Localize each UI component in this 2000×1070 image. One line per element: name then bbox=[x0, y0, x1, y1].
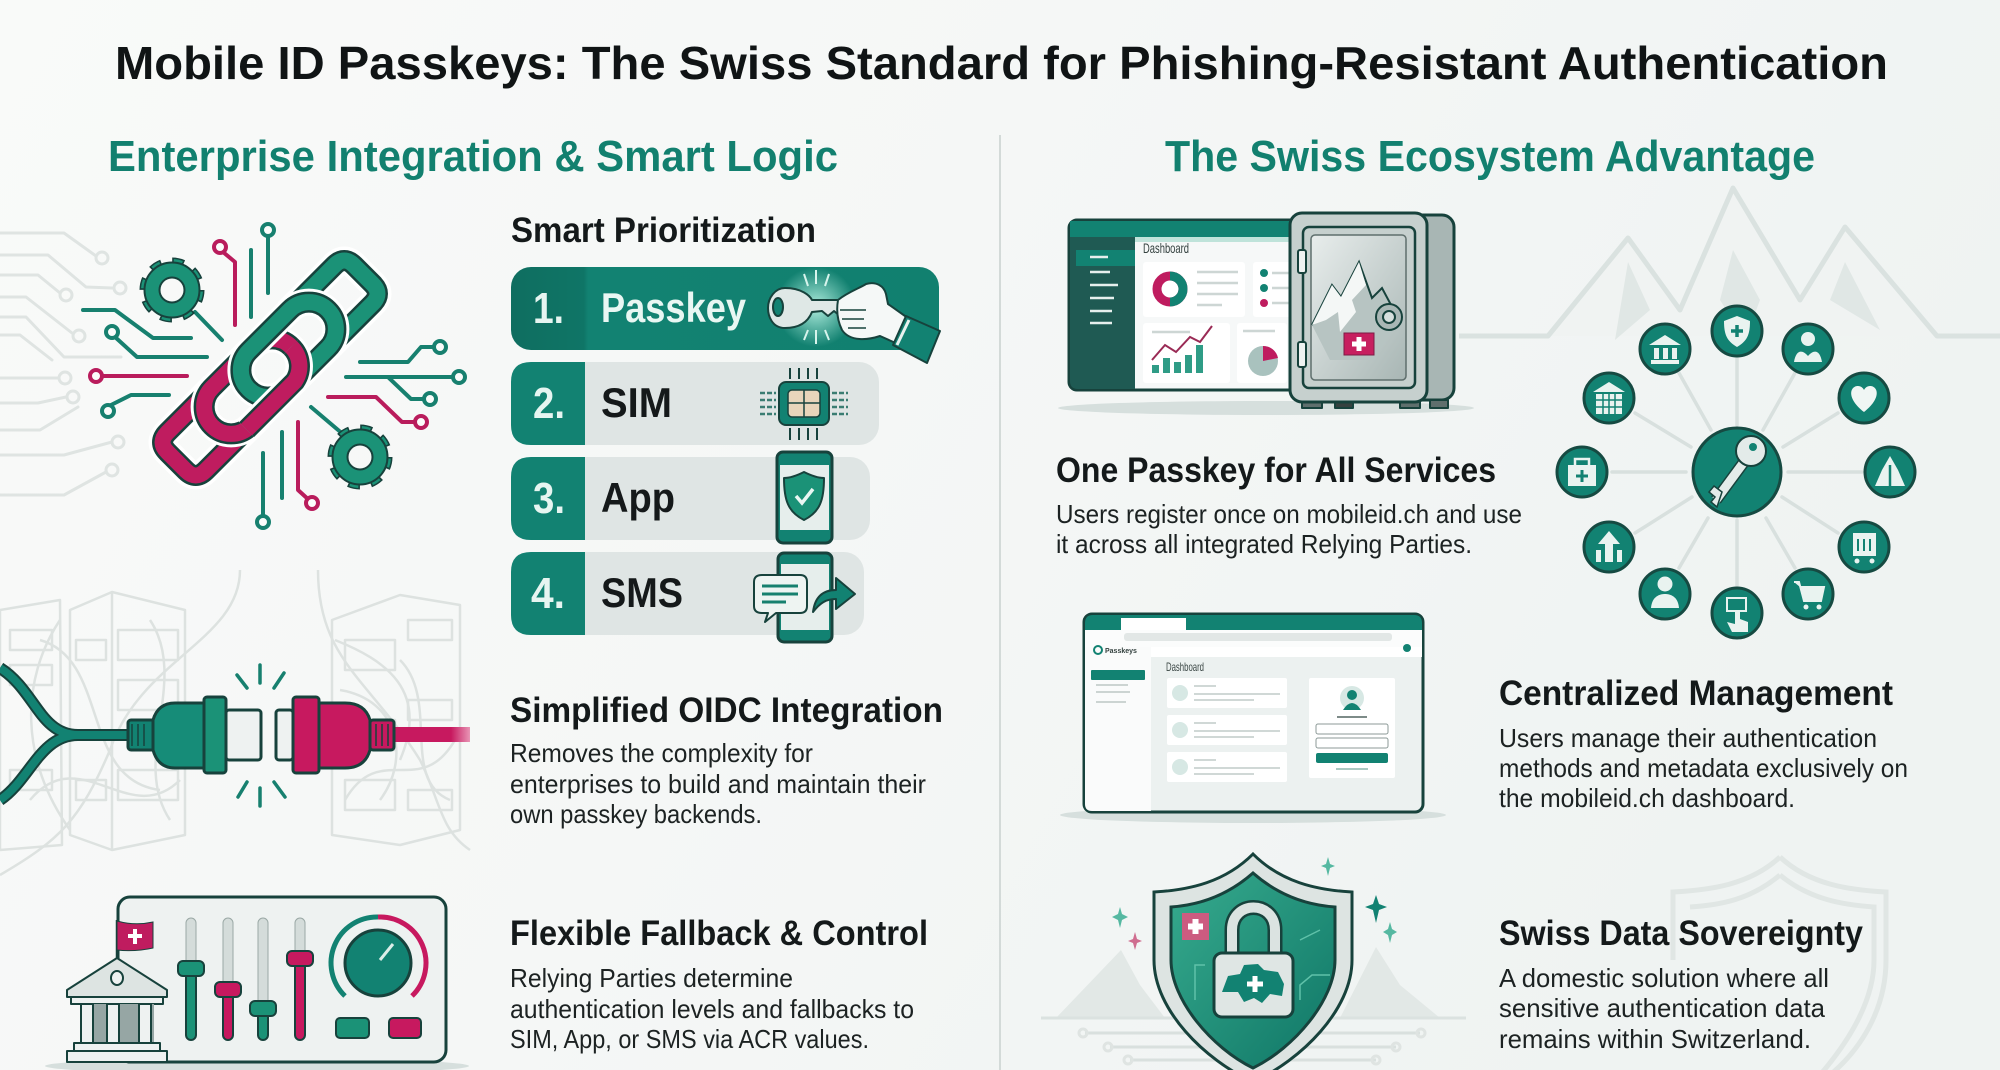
illustration: browser management dashboard: Dashboard bbox=[1166, 660, 1204, 674]
text block: Swiss data sovereignty: Swiss Data Sovereignty bbox=[1499, 914, 1863, 953]
text block: one passkey for all services bbox=[1056, 451, 1522, 559]
text block: one passkey for all services: Users register once on mobileid.ch and use bbox=[1056, 499, 1522, 529]
list item 2: SIM: SIM bbox=[601, 379, 672, 426]
node: community figures bbox=[1865, 447, 1915, 497]
button: pink bbox=[389, 1018, 421, 1038]
card: devices bbox=[1167, 715, 1287, 745]
list item 4: SMS: 4. bbox=[531, 569, 565, 618]
icon: connection sparks bbox=[237, 665, 285, 806]
node: bank bbox=[1640, 324, 1690, 374]
text block: Swiss data sovereignty: sensitive authentication data bbox=[1499, 993, 1826, 1023]
illustration: shield with lock and Swiss map bbox=[1041, 854, 1466, 1070]
text block: centralized management: the mobileid.ch dashboard. bbox=[1499, 783, 1795, 813]
list item 2: SIM: 2. bbox=[533, 379, 565, 428]
illustration: dashboard and vault bbox=[1058, 213, 1474, 415]
dashboard window bbox=[1069, 220, 1310, 390]
text block: simplified OIDC integration: Simplified OIDC Integration bbox=[510, 691, 943, 730]
icon: key in hand bbox=[768, 267, 940, 363]
title: Mobile ID Passkeys: The Swiss Standard for Phishing-Resistant Authentication bbox=[115, 37, 1888, 89]
illustration: browser management dashboard bbox=[1060, 614, 1446, 823]
text block: flexible fallback and control: authentication levels and fallbacks to bbox=[510, 994, 914, 1024]
diagram: passkey hub and service network bbox=[1557, 306, 1915, 638]
node: person with pin bbox=[1783, 324, 1833, 374]
heading: right column: The Swiss Ecosystem Advantage bbox=[1165, 132, 1815, 181]
illustration: control panel with institution bbox=[45, 897, 469, 1070]
icon: vault with Swiss flag bbox=[1290, 213, 1454, 408]
list item 4: SMS bbox=[511, 552, 864, 642]
text block: simplified OIDC integration bbox=[510, 691, 943, 829]
text block: Swiss data sovereignty: remains within Switzerland. bbox=[1499, 1024, 1811, 1054]
text block: simplified OIDC integration: own passkey backends. bbox=[510, 799, 762, 829]
icon: SIM chip bbox=[760, 368, 848, 440]
icon: padlock with Swiss map bbox=[1214, 908, 1293, 1017]
button: green bbox=[336, 1018, 369, 1038]
icon: phone with shield bbox=[777, 452, 832, 543]
background: ghost servers and cables bbox=[0, 570, 470, 875]
card: profile form bbox=[1309, 678, 1395, 778]
list item 3: App bbox=[511, 452, 870, 543]
background: ghost circuit lines bbox=[0, 233, 126, 495]
node: heart bbox=[1839, 373, 1889, 423]
text block: Swiss data sovereignty: A domestic solution where all bbox=[1499, 963, 1829, 993]
list item 1: passkey bbox=[511, 267, 940, 363]
heading: left column: Enterprise Integration & Smart Logic bbox=[108, 132, 838, 181]
icon: phone with message bubble and arrow bbox=[754, 553, 855, 642]
text block: simplified OIDC integration: Removes the complexity for bbox=[510, 738, 813, 768]
icon: sliders bbox=[178, 918, 313, 1040]
card: methods bbox=[1167, 678, 1287, 708]
text block: flexible fallback and control: Relying Parties determine bbox=[510, 963, 793, 993]
list item 1: passkey: Passkey bbox=[601, 284, 747, 331]
list item 2: SIM bbox=[511, 362, 879, 445]
node: medical bag bbox=[1557, 447, 1607, 497]
list item 4: SMS: SMS bbox=[601, 569, 683, 616]
icon: gear lower bbox=[333, 430, 387, 484]
list item 3: App: 3. bbox=[533, 474, 565, 523]
text block: flexible fallback and control bbox=[510, 914, 928, 1054]
icon: interlocked chain bbox=[158, 256, 382, 480]
text block: one passkey for all services: One Passkey for All Services bbox=[1056, 451, 1496, 490]
text block: Swiss data sovereignty bbox=[1499, 914, 1863, 1054]
text block: centralized management bbox=[1499, 674, 1908, 813]
hub: key bbox=[1693, 428, 1781, 516]
text block: one passkey for all services: it across all integrated Relying Parties. bbox=[1056, 529, 1472, 559]
background: ghost shield bbox=[1673, 857, 1886, 1070]
list item 3: App: App bbox=[601, 474, 675, 521]
text block: simplified OIDC integration: enterprises to build and maintain their bbox=[510, 769, 926, 799]
text block: centralized management: Centralized Management bbox=[1499, 674, 1893, 713]
node: hand tapping bbox=[1712, 588, 1762, 638]
icon: Swiss flag bbox=[1182, 913, 1209, 940]
heading: smart prioritization: Smart Prioritization bbox=[511, 211, 816, 250]
list item 1: passkey: 1. bbox=[533, 284, 564, 333]
ghost mountains and circuits behind shield bbox=[1041, 947, 1466, 1064]
illustration: plug and socket connector bbox=[0, 665, 470, 806]
card: metadata bbox=[1167, 752, 1287, 782]
dashboard window: Dashboard bbox=[1143, 240, 1189, 256]
text block: flexible fallback and control: SIM, App, or SMS via ACR values. bbox=[510, 1024, 869, 1054]
text block: flexible fallback and control: Flexible Fallback & Control bbox=[510, 914, 928, 953]
icon: sparkles bbox=[1112, 857, 1397, 950]
illustration: chain link with circuits bbox=[83, 224, 465, 528]
text block: centralized management: methods and metadata exclusively on bbox=[1499, 753, 1908, 783]
node: shield bbox=[1712, 306, 1762, 356]
chart: pie bbox=[1243, 331, 1278, 376]
illustration: browser management dashboard: Passkeys bbox=[1105, 648, 1137, 655]
node: shopping cart bbox=[1783, 569, 1833, 619]
chart: line and bars bbox=[1152, 326, 1212, 373]
node: arrow and columns bbox=[1584, 522, 1634, 572]
icon: dial bbox=[331, 917, 426, 996]
background: ghost mountains bbox=[1459, 188, 2000, 340]
chart: donut bbox=[1157, 276, 1183, 302]
icon: gear upper bbox=[145, 263, 199, 317]
icon: institution building with Swiss flag bbox=[67, 920, 167, 1062]
node: building bbox=[1584, 373, 1634, 423]
text block: centralized management: Users manage their authentication bbox=[1499, 723, 1877, 753]
node: person bbox=[1640, 569, 1690, 619]
node: storefront bbox=[1839, 522, 1889, 572]
